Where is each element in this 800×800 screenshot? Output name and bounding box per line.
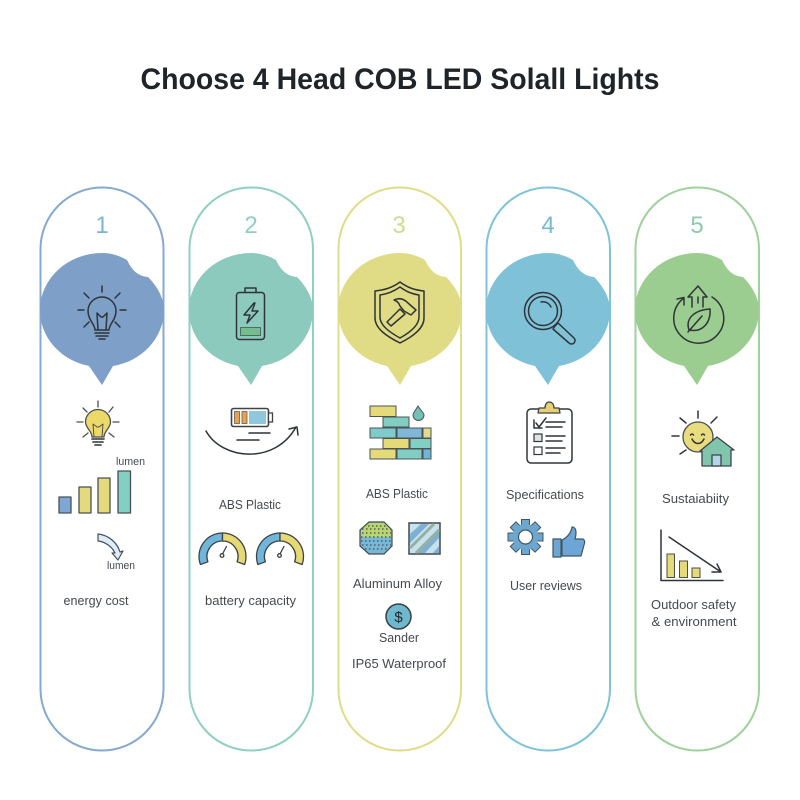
column 3 number: 3 <box>392 212 406 239</box>
bar chart: lumen <box>59 471 130 513</box>
column 1 outline <box>40 188 164 750</box>
label: Sander: Sander <box>379 630 420 645</box>
label: Aluminum Alloy: Aluminum Alloy <box>353 576 442 591</box>
column 3 outline <box>338 188 461 750</box>
label: Outdoor safety: Outdoor safety <box>651 597 736 612</box>
panel: column 2 <box>189 188 313 750</box>
label: lumen: lumen <box>116 456 145 468</box>
icon: striped square <box>409 523 440 554</box>
label: & environment: & environment <box>652 614 737 629</box>
icon: brick wall <box>370 406 431 459</box>
icon: leaf cycle <box>674 286 724 343</box>
icon: house <box>700 437 734 466</box>
icon: yellow bulb <box>77 401 119 445</box>
column 2 outline <box>190 188 313 750</box>
label: IP65 Waterproof: IP65 Waterproof <box>352 656 446 671</box>
column 4 number: 4 <box>541 212 555 239</box>
icon: battery with arrow <box>206 408 298 454</box>
column 1 number: 1 <box>95 212 109 239</box>
label: energy cost: energy cost <box>64 593 129 608</box>
label: lumen lower: lumen <box>107 560 135 572</box>
label: Specifications: Specifications <box>506 487 584 502</box>
label: User reviews: User reviews <box>510 578 582 593</box>
column 3 speech bubble <box>338 253 462 385</box>
label: battery capacity: battery capacity <box>205 593 296 608</box>
icon: perforated octagon <box>360 522 392 554</box>
column 4 outline <box>486 188 610 750</box>
icon: smiling sun <box>672 411 717 454</box>
panel: column 3 <box>338 188 462 750</box>
column 1 speech bubble <box>40 253 164 385</box>
column 5 number: 5 <box>690 212 704 239</box>
column 2 number: 2 <box>244 212 258 239</box>
icon: shield with hammer <box>375 282 424 343</box>
panel: column 5 <box>635 188 759 750</box>
column 4 speech bubble <box>486 253 610 385</box>
panel: column 4 <box>486 188 610 750</box>
label: Sustaiabiity: Sustaiabiity <box>662 491 729 506</box>
label: ABS Plastic: ABS Plastic <box>219 497 281 512</box>
icon: magnifying glass <box>524 292 575 344</box>
column 2 speech bubble <box>189 253 313 385</box>
column 5 speech bubble <box>635 253 759 385</box>
icon: light bulb outline <box>78 286 126 339</box>
icon: curved arrow <box>98 534 123 560</box>
icon: battery charging <box>236 288 264 340</box>
icon: thumbs up <box>553 527 585 557</box>
title: Choose 4 Head COB LED Solall Lights <box>140 63 660 96</box>
column 5 outline <box>636 188 759 750</box>
panel: column 1 <box>40 188 164 750</box>
label: ABS Plastic: ABS Plastic <box>366 486 428 501</box>
icon: gauge left <box>199 533 246 564</box>
icon: dollar coin <box>386 604 411 629</box>
icon: clipboard checklist <box>527 402 572 463</box>
icon: declining chart <box>661 530 723 580</box>
icon: gauge right <box>256 533 304 564</box>
icon: gear <box>508 520 543 554</box>
icon: dollar coin: $ <box>394 609 403 626</box>
